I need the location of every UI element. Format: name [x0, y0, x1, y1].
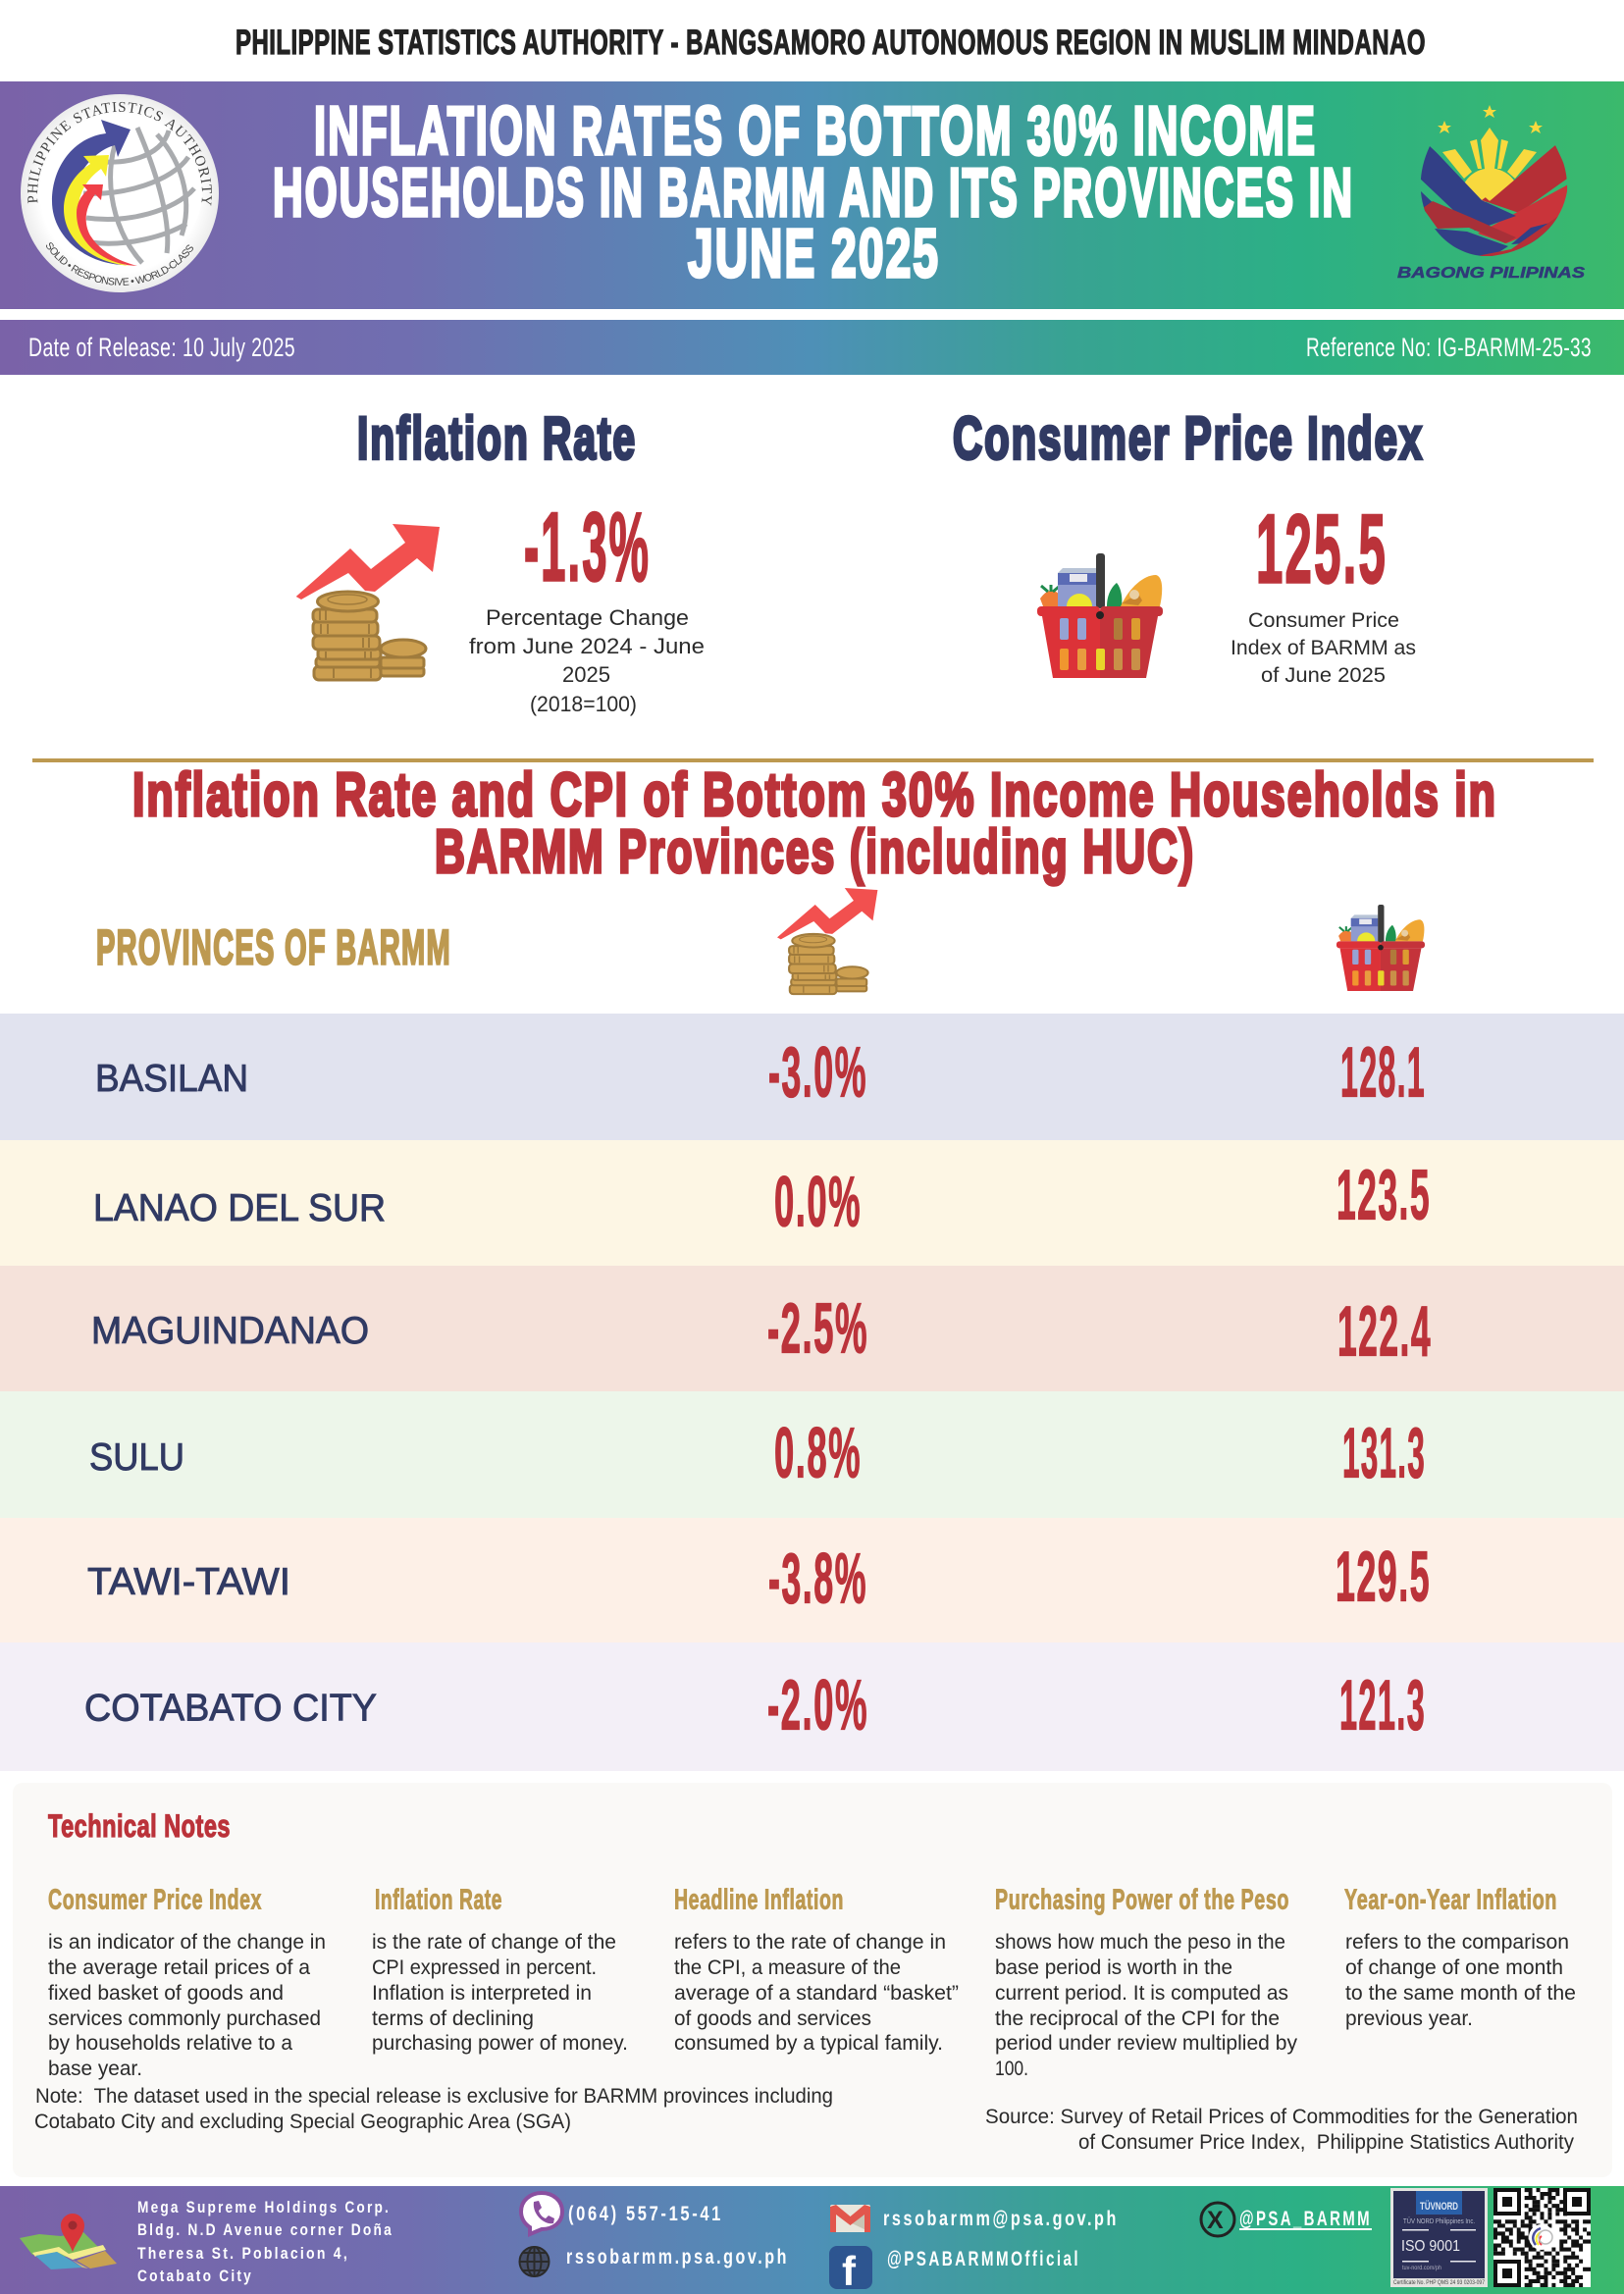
table row: Sulu: 131.3	[1342, 1415, 1426, 1493]
icon: map pin	[20, 2214, 117, 2269]
section heading: BARMM Provinces (including HUC)	[435, 818, 1195, 886]
note: purchasing power of the peso: the reciprocal of the CPI for the	[995, 2007, 1280, 2030]
note: purchasing power of the peso: shows how much the peso in the	[995, 1931, 1285, 1954]
ISO 9001 certification badge: TÜV NORD Philippines Inc.	[1403, 2216, 1475, 2225]
table row: Basilan: BASILAN	[95, 1058, 248, 1100]
table row: Maguindanao	[0, 1266, 1624, 1391]
table row: Tawi-Tawi: 129.5	[1336, 1538, 1431, 1617]
icon: coins with arrow	[296, 524, 440, 680]
icon: PSA logo: PHILIPPINE STATISTICS AUTHORITY	[27, 102, 212, 206]
table row: Lanao del Sur	[0, 1140, 1624, 1266]
header banner	[0, 81, 1624, 309]
note: headline inflation: of goods and services	[674, 2007, 871, 2030]
icon: X	[1201, 2203, 1234, 2236]
address: Cotabato City	[137, 2267, 253, 2285]
email: rssobarmm@psa.gov.ph	[883, 2208, 1119, 2230]
phone number: (064) 557-15-41	[568, 2203, 723, 2225]
text: inflation description: 2025	[562, 662, 610, 687]
panel: inflation rate summary: -1.3%	[524, 493, 651, 600]
note: headline inflation: consumed by a typical family.	[674, 2032, 943, 2055]
note: purchasing power of the peso: base period is worth in the	[995, 1956, 1232, 1979]
table row: Tawi-Tawi: -3.8%	[768, 1540, 867, 1619]
dataset note: Cotabato City and excluding Special Geographic Area (SGA)	[34, 2111, 571, 2133]
note: consumer price index: fixed basket of goods and	[48, 1982, 284, 2005]
ISO 9001 certification badge: TÜVNORD	[1420, 2200, 1458, 2213]
table row: Lanao del Sur: LANAO DEL SUR	[93, 1187, 386, 1229]
ISO 9001 certification badge	[1390, 2188, 1488, 2287]
dataset note	[34, 2085, 833, 2133]
note: headline inflation: average of a standard “basket”	[674, 1982, 959, 2005]
icon: globe	[520, 2247, 550, 2276]
note: consumer price index: the average retail prices of a	[48, 1956, 310, 1979]
note: inflation rate: Inflation Rate	[375, 1884, 502, 1915]
heading: consumer price index: Consumer Price Index	[953, 404, 1424, 471]
table row: Lanao del Sur: 123.5	[1336, 1156, 1431, 1234]
X handle: @PSA_BARMM	[1239, 2208, 1372, 2230]
icon: viber phone	[521, 2193, 562, 2234]
table column header icon: CPI	[1336, 905, 1425, 991]
text: inflation description: (2018=100)	[530, 692, 637, 716]
address: Theresa St. Poblacion 4,	[137, 2244, 349, 2263]
note: inflation rate: Inflation is interpreted in	[372, 1982, 592, 2005]
text: CPI description: Index of BARMM as	[1231, 637, 1416, 659]
address	[137, 2198, 393, 2285]
source note	[985, 2106, 1578, 2154]
table row: Maguindanao: 122.4	[1337, 1293, 1432, 1372]
table row: Basilan	[0, 1014, 1624, 1140]
table row: Cotabato City: 121.3	[1339, 1666, 1426, 1745]
facebook handle: @PSABARMMOfficial	[887, 2248, 1080, 2270]
table row: Sulu: SULU	[89, 1436, 184, 1479]
table row: Cotabato City	[0, 1642, 1624, 1771]
icon: PSA logo: SOLID • RESPONSIVE • WORLD-CLASS	[46, 242, 193, 286]
note: headline inflation: Headline Inflation	[674, 1884, 844, 1915]
text: inflation description: from June 2024 - June	[469, 634, 705, 658]
note: year-on-year inflation: of change of one month	[1345, 1956, 1563, 1979]
release info bar	[0, 320, 1624, 375]
note: consumer price index	[48, 1884, 326, 2080]
footer	[0, 2186, 1624, 2294]
table row: Lanao del Sur: 0.0%	[774, 1164, 862, 1242]
table row: Maguindanao: -2.5%	[767, 1289, 868, 1368]
ISO 9001 certification badge: tuv-nord.com/ph	[1402, 2265, 1441, 2271]
note: inflation rate: terms of declining	[372, 2007, 534, 2030]
note: year-on-year inflation: previous year.	[1345, 2007, 1473, 2030]
source note: Source: Survey of Retail Prices of Commodities for the Generation	[985, 2106, 1578, 2128]
QR code	[1493, 2188, 1591, 2287]
website: rssobarmm.psa.gov.ph	[566, 2246, 789, 2268]
ISO 9001 certification badge: ISO 9001	[1401, 2238, 1460, 2255]
text: CPI description: Consumer Price	[1248, 609, 1399, 632]
note: consumer price index: base year.	[48, 2058, 142, 2080]
ISO 9001 certification badge: Certificate No. PHP QMS 24 93 0203-097	[1393, 2279, 1485, 2286]
icon: gmail	[830, 2205, 870, 2232]
icon: facebook	[829, 2246, 872, 2294]
note: inflation rate: CPI expressed in percent.	[372, 1956, 597, 1979]
table row: Cotabato City: COTABATO CITY	[84, 1688, 377, 1729]
note: year-on-year inflation	[1344, 1884, 1576, 2030]
text: inflation description	[469, 605, 705, 716]
main title	[273, 92, 1354, 291]
heading: inflation rate: Inflation Rate	[357, 404, 637, 471]
note: headline inflation: refers to the rate of change in	[674, 1931, 946, 1954]
table row: Sulu: 0.8%	[774, 1415, 862, 1493]
note: consumer price index: by households relative to a	[48, 2032, 292, 2055]
icon: Bagong Pilipinas logo	[1397, 105, 1585, 282]
table row: Basilan: 128.1	[1340, 1034, 1426, 1113]
note: inflation rate: purchasing power of money.	[372, 2032, 628, 2055]
table row: Cotabato City: -2.0%	[767, 1666, 868, 1745]
note: purchasing power of the peso: period under review multiplied by	[995, 2032, 1297, 2055]
dataset note: Note: The dataset used in the special release is exclusive for BARMM provinces including	[35, 2085, 833, 2108]
panel: inflation rate summary	[296, 404, 705, 716]
table row: Maguindanao: MAGUINDANAO	[91, 1310, 369, 1352]
note: purchasing power of the peso: 100.	[995, 2058, 1028, 2080]
icon: grocery basket	[1037, 553, 1163, 678]
section heading	[132, 761, 1497, 886]
heading: technical notes: Technical Notes	[48, 1808, 231, 1844]
panel: consumer price index summary	[953, 404, 1424, 687]
note: year-on-year inflation: refers to the comparison	[1345, 1931, 1569, 1954]
note: headline inflation: the CPI, a measure of the	[674, 1956, 901, 1979]
table row: Sulu	[0, 1391, 1624, 1518]
note: purchasing power of the peso: Purchasing Power of the Peso	[995, 1884, 1289, 1915]
table row: Tawi-Tawi	[0, 1518, 1624, 1642]
table column header: provinces: PROVINCES OF BARMM	[96, 920, 451, 975]
note: consumer price index: services commonly purchased	[48, 2007, 321, 2030]
table column header icon: inflation	[777, 888, 877, 994]
icon: Bagong Pilipinas logo: BAGONG PILIPINAS	[1397, 265, 1585, 282]
icon: PSA logo	[21, 94, 219, 292]
panel: consumer price index summary: 125.5	[1256, 495, 1388, 602]
note: inflation rate	[372, 1884, 628, 2055]
main title: JUNE 2025	[688, 215, 940, 291]
release info bar: Date of Release: 10 July 2025	[28, 333, 295, 362]
note: consumer price index: Consumer Price Index	[48, 1884, 262, 1915]
note: headline inflation	[674, 1884, 959, 2055]
note: consumer price index: is an indicator of the change in	[48, 1931, 326, 1954]
panel: technical notes	[13, 1783, 1612, 2177]
source note: of Consumer Price Index, Philippine Statistics Authority	[1078, 2131, 1574, 2154]
text: CPI description	[1231, 609, 1416, 687]
address: Bldg. N.D Avenue corner Doña	[137, 2220, 393, 2239]
icon: facebook: f	[842, 2248, 857, 2294]
icon: X: X	[1207, 2207, 1224, 2234]
table row: Basilan: -3.0%	[768, 1034, 867, 1113]
address: Mega Supreme Holdings Corp.	[137, 2198, 391, 2216]
table row: Tawi-Tawi: TAWI-TAWI	[87, 1561, 290, 1603]
note: inflation rate: is the rate of change of the	[372, 1931, 616, 1954]
note: year-on-year inflation: to the same month of the	[1345, 1982, 1576, 2005]
text: inflation description: Percentage Change	[486, 605, 689, 630]
text: CPI description: of June 2025	[1261, 664, 1386, 687]
note: purchasing power of the peso: current period. It is computed as	[995, 1982, 1288, 2005]
note: purchasing power of the peso	[995, 1884, 1297, 2080]
